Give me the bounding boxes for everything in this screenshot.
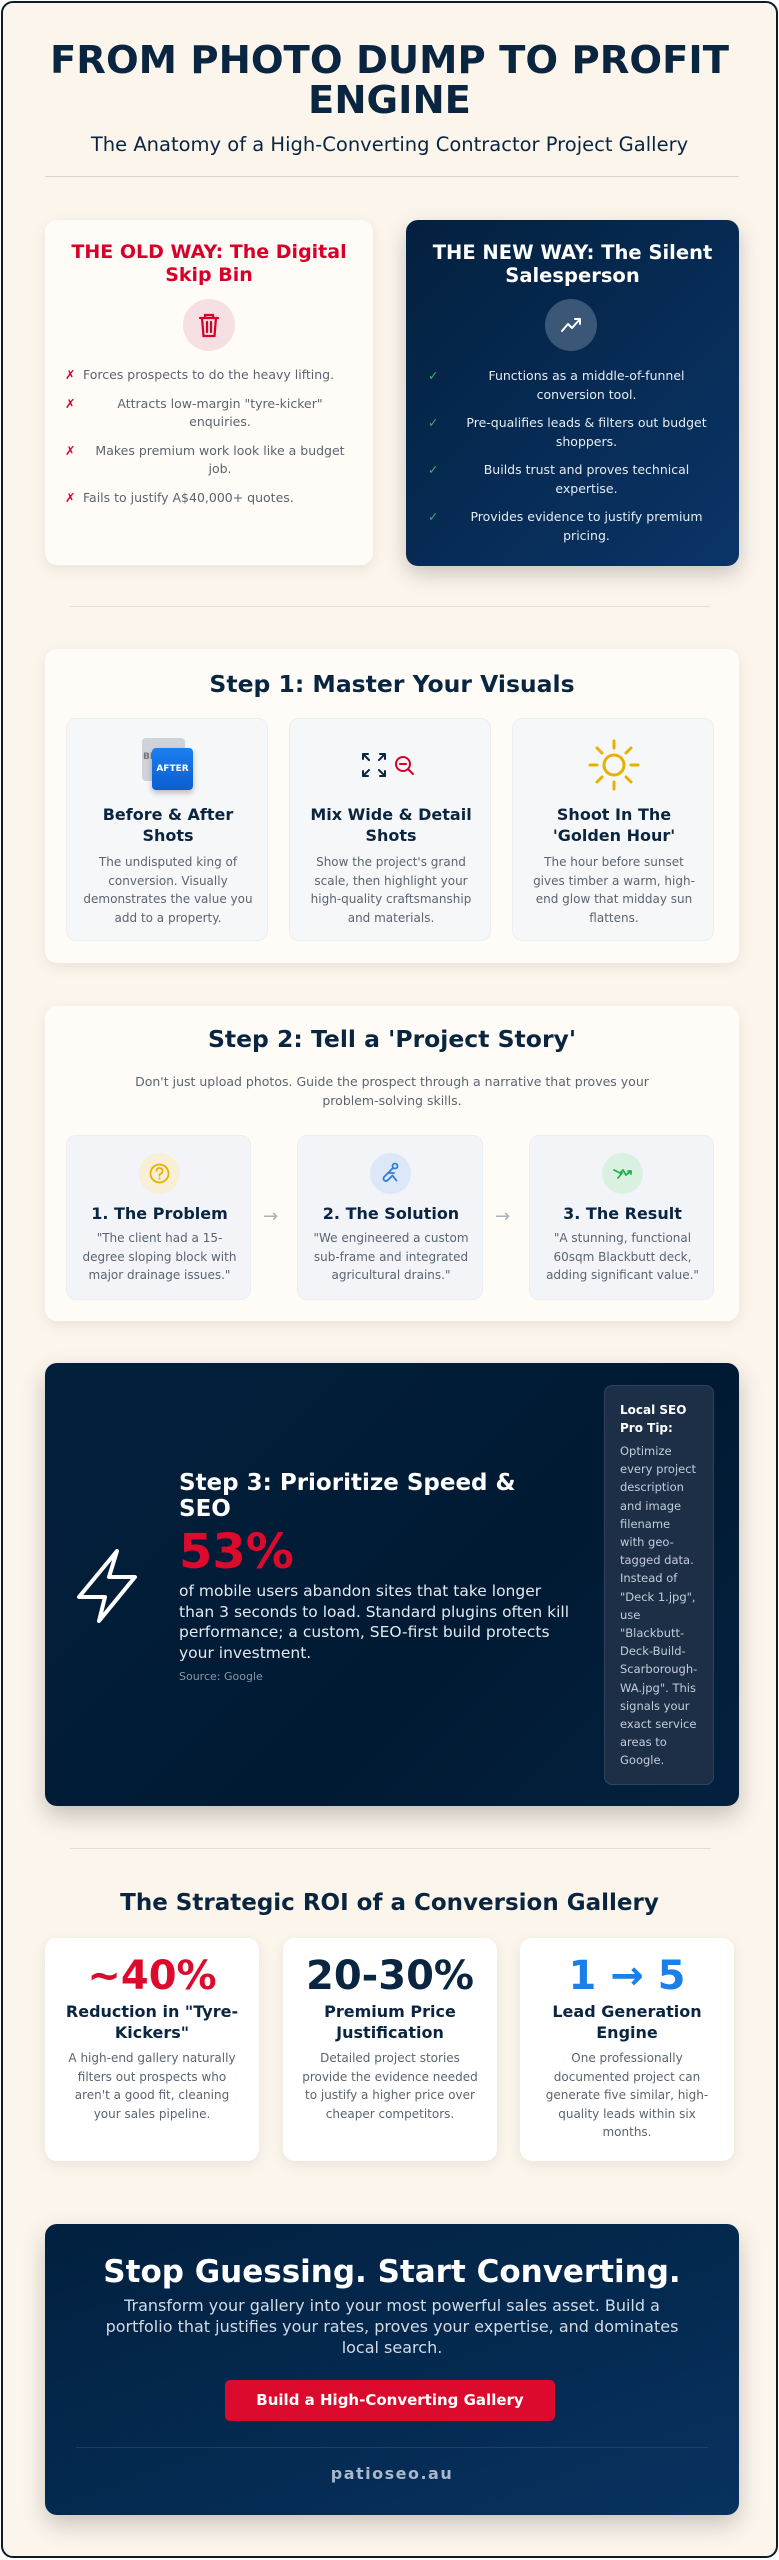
- title: ENGINE: [308, 78, 471, 123]
- stat card: tyre-kickers: aren't a good fit, cleaning: [75, 2088, 229, 2102]
- new way heading: [432, 241, 712, 287]
- golden hour text: end glow that midday sun: [536, 892, 692, 906]
- title: [50, 38, 729, 123]
- callout: local seo tip: exact service: [620, 1717, 696, 1731]
- stat text: of mobile users abandon sites that take longer: [179, 1582, 541, 1600]
- new way heading: Salesperson: [505, 264, 640, 287]
- stat card: tyre-kickers: [45, 1938, 259, 2161]
- result title: 3. The Result: [563, 1204, 682, 1223]
- golden hour title: [553, 805, 675, 845]
- before after text: demonstrates the value you: [83, 892, 253, 906]
- callout: local seo tip: [604, 1385, 714, 1785]
- title: FROM PHOTO DUMP TO PROFIT: [50, 38, 729, 83]
- stat card: tyre-kickers: ~40%: [87, 1953, 217, 1999]
- callout: local seo tip: Optimize: [620, 1444, 672, 1458]
- new way list: shoppers.: [556, 434, 617, 448]
- before after text: The undisputed king of: [99, 855, 237, 869]
- solution text: sub-frame and integrated: [314, 1250, 468, 1264]
- stat card: lead generation: One professionally: [571, 2051, 683, 2065]
- stat card: tyre-kickers: your sales pipeline.: [94, 2106, 210, 2120]
- step 2 intro: Don't just upload photos. Guide the prospect through a narrative that proves your: [135, 1074, 649, 1089]
- icon: trend: [602, 1153, 643, 1194]
- cta button: Build a High-Converting Gallery: [256, 2391, 524, 2409]
- stat card: premium price: Justification: [336, 2023, 444, 2042]
- step 2 heading: Step 2: Tell a 'Project Story': [208, 1025, 576, 1053]
- icon: before/after: [142, 738, 196, 796]
- golden hour text: [533, 855, 695, 924]
- step 3 heading: SEO: [179, 1496, 231, 1522]
- before after text: conversion. Visually: [108, 874, 228, 888]
- callout: local seo tip: areas to: [620, 1735, 667, 1749]
- stat card: premium price: to justify a higher price over: [305, 2088, 475, 2102]
- callout: local seo tip: description: [620, 1480, 684, 1494]
- callout: local seo tip: Google.: [620, 1753, 664, 1767]
- icon: trend arrow: [545, 299, 597, 351]
- problem text: degree sloping block with: [83, 1250, 236, 1264]
- panel: step 2: [45, 1006, 739, 1321]
- golden hour title: 'Golden Hour': [553, 826, 675, 845]
- card: before & after: [66, 718, 268, 941]
- result text: "A stunning, functional: [554, 1231, 691, 1245]
- callout: local seo tip: Scarborough-: [620, 1662, 697, 1676]
- stat card: premium price: 20-30%: [306, 1953, 474, 1999]
- callout: local seo tip: "Blackbutt-: [620, 1626, 684, 1640]
- old way list: ✗: [65, 367, 75, 382]
- wide detail title: [310, 805, 472, 845]
- icon: tool: [370, 1153, 411, 1194]
- callout: local seo tip: with geo-: [620, 1535, 674, 1549]
- panel: step 1: [45, 649, 739, 963]
- before after title: Before & After: [103, 805, 233, 824]
- panel: step 3: [45, 1363, 739, 1806]
- panel: new way: [406, 220, 739, 566]
- card: wide & detail: [289, 718, 491, 941]
- callout: local seo tip: and image: [620, 1499, 681, 1513]
- heading: ROI: The Strategic ROI of a Conversion Gallery: [120, 1890, 659, 1916]
- step 1 heading: Step 1: Master Your Visuals: [209, 670, 575, 698]
- cta text: portfolio that justifies your rates, proves your expertise, and dominates: [106, 2317, 678, 2336]
- arrow: →: [263, 1206, 278, 1227]
- old way list: job.: [208, 461, 232, 476]
- new way list: Pre-qualifies leads & filters out budget: [466, 415, 707, 430]
- step 2 intro: problem-solving skills.: [322, 1092, 462, 1108]
- old way list: enquiries.: [189, 414, 251, 429]
- panel: old way: [45, 220, 373, 565]
- callout: local seo tip: Instead of: [620, 1571, 677, 1585]
- cta text: local search.: [342, 2338, 442, 2357]
- old way heading: THE OLD WAY: The Digital: [71, 241, 347, 263]
- icon: expand and zoom: [362, 753, 414, 777]
- stat text: [179, 1582, 569, 1662]
- stat card: lead generation: 1 → 5: [568, 1953, 686, 1999]
- new way list: ✓: [428, 415, 438, 430]
- subtitle: The Anatomy of a High-Converting Contractor Project Gallery: [91, 133, 688, 156]
- cta heading: Stop Guessing. Start Converting.: [103, 2254, 681, 2290]
- step 3 heading: [179, 1470, 516, 1522]
- stat card: premium price: Detailed project stories: [320, 2051, 460, 2065]
- golden hour text: flattens.: [589, 910, 639, 924]
- callout: local seo tip: filename: [620, 1517, 670, 1531]
- callout: local seo tip: Deck-Build-: [620, 1644, 686, 1658]
- card: problem: [66, 1135, 251, 1300]
- new way list: ✓: [428, 509, 438, 524]
- old way list: Forces prospects to do the heavy lifting.: [83, 367, 334, 382]
- new way list: Functions as a middle-of-funnel: [488, 368, 685, 383]
- stat text: your investment.: [179, 1644, 311, 1662]
- cta button: [225, 2380, 555, 2421]
- step 3 heading: Step 3: Prioritize Speed &: [179, 1470, 516, 1496]
- before after title: Shots: [142, 826, 194, 845]
- before after text: add to a property.: [115, 910, 221, 924]
- old way list: ✗: [65, 490, 75, 505]
- new way list: [428, 368, 707, 542]
- result text: [546, 1231, 699, 1282]
- icon: lightning: [76, 1549, 138, 1623]
- old way list: Attracts low-margin "tyre-kicker": [117, 396, 323, 411]
- golden hour title: Shoot In The: [557, 805, 671, 824]
- card: result: [529, 1135, 714, 1300]
- callout: local seo tip: WA.jpg". This: [620, 1681, 696, 1695]
- stat card: tyre-kickers: Kickers": [115, 2023, 189, 2042]
- new way heading: THE NEW WAY: The Silent: [433, 241, 712, 264]
- icon: before/after: AFTER: [156, 764, 189, 774]
- new way list: ✓: [428, 462, 438, 477]
- callout: local seo tip: Pro Tip:: [620, 1421, 673, 1435]
- callout: local seo tip: tagged data.: [620, 1553, 694, 1567]
- problem text: "The client had a 15-: [97, 1231, 222, 1245]
- panel: ROI stats: [44, 1938, 735, 2166]
- icon: trash bin: [183, 299, 235, 351]
- new way list: Provides evidence to justify premium: [470, 509, 703, 524]
- wide detail text: and materials.: [348, 910, 434, 924]
- new way list: expertise.: [555, 480, 618, 496]
- old way list: Fails to justify A$40,000+ quotes.: [83, 490, 294, 505]
- stat card: lead generation: generate five similar, high-: [546, 2088, 708, 2102]
- old way list: Makes premium work look like a budget: [95, 443, 345, 458]
- new way list: Builds trust and proves technical: [484, 462, 689, 477]
- stat card: lead generation: quality leads within six: [558, 2106, 696, 2120]
- old way list: ✗: [65, 443, 75, 458]
- old way heading: [71, 241, 347, 286]
- card: golden hour: [512, 718, 714, 941]
- golden hour text: gives timber a warm, high-: [533, 874, 695, 888]
- callout: local seo tip: Local SEO: [620, 1403, 686, 1417]
- solution title: 2. The Solution: [323, 1204, 459, 1223]
- result text: adding significant value.": [546, 1268, 699, 1282]
- callout: local seo tip: use: [620, 1608, 640, 1622]
- source: Source: Google: [179, 1670, 263, 1683]
- before after text: [83, 855, 253, 924]
- stat card: premium price: provide the evidence needed: [302, 2070, 478, 2084]
- step 2 intro: [135, 1074, 649, 1108]
- problem text: major drainage issues.": [89, 1268, 230, 1282]
- card: solution: [297, 1135, 483, 1300]
- golden hour text: The hour before sunset: [544, 855, 684, 869]
- stat 53%: 53%: [179, 1524, 294, 1580]
- problem text: [83, 1231, 236, 1282]
- stat card: premium price: Premium Price: [324, 2002, 456, 2021]
- old way list: [65, 367, 345, 505]
- stat card: lead generation: Lead Generation: [552, 2002, 702, 2021]
- stat card: lead generation: documented project can: [554, 2070, 700, 2084]
- stat text: than 3 seconds to load. Standard plugins often kill: [179, 1603, 569, 1621]
- wide detail text: high-quality craftsmanship: [311, 892, 471, 906]
- callout: local seo tip: signals your: [620, 1699, 690, 1713]
- new way list: pricing.: [563, 528, 610, 542]
- cta text: [106, 2296, 678, 2357]
- icon: question: [139, 1153, 180, 1194]
- solution text: agricultural drains.": [332, 1268, 450, 1282]
- old way heading: Skip Bin: [165, 264, 253, 286]
- wide detail title: Mix Wide & Detail: [310, 805, 472, 824]
- cta text: Transform your gallery into your most powerful sales asset. Build a: [124, 2296, 660, 2315]
- footer brand: patioseo.au: [331, 2464, 453, 2483]
- stat card: tyre-kickers: filters out prospects who: [78, 2070, 226, 2084]
- stat card: lead generation: Engine: [596, 2023, 658, 2042]
- callout: local seo tip: every project: [620, 1462, 696, 1476]
- wide detail text: [311, 855, 471, 924]
- stat text: performance; a custom, SEO-first build protects: [179, 1623, 550, 1641]
- before after title: [103, 805, 234, 845]
- icon: sun: [588, 740, 640, 790]
- new way list: ✓: [428, 368, 438, 383]
- problem title: 1. The Problem: [91, 1204, 228, 1223]
- icon: before/after: BE: [143, 752, 156, 762]
- arrow: →: [495, 1206, 510, 1227]
- panel: call to action: [45, 2224, 739, 2515]
- wide detail text: Show the project's grand: [316, 855, 466, 869]
- new way list: conversion tool.: [537, 386, 636, 402]
- stat card: tyre-kickers: A high-end gallery naturally: [68, 2051, 236, 2065]
- result text: 60sqm Blackbutt deck,: [554, 1250, 691, 1264]
- wide detail text: scale, then highlight your: [314, 874, 468, 888]
- solution text: [313, 1231, 469, 1282]
- stat card: lead generation: [520, 1938, 734, 2161]
- stat card: tyre-kickers: Reduction in "Tyre-: [66, 2002, 238, 2021]
- old way list: ✗: [65, 396, 75, 411]
- stat card: premium price: cheaper competitors.: [326, 2106, 454, 2120]
- stat card: premium price: [283, 1938, 497, 2161]
- wide detail title: Shots: [365, 826, 417, 845]
- callout: local seo tip: "Deck 1.jpg",: [620, 1590, 696, 1604]
- step 3 text: [179, 1470, 569, 1683]
- stat card: lead generation: months.: [602, 2125, 652, 2139]
- solution text: "We engineered a custom: [313, 1231, 469, 1245]
